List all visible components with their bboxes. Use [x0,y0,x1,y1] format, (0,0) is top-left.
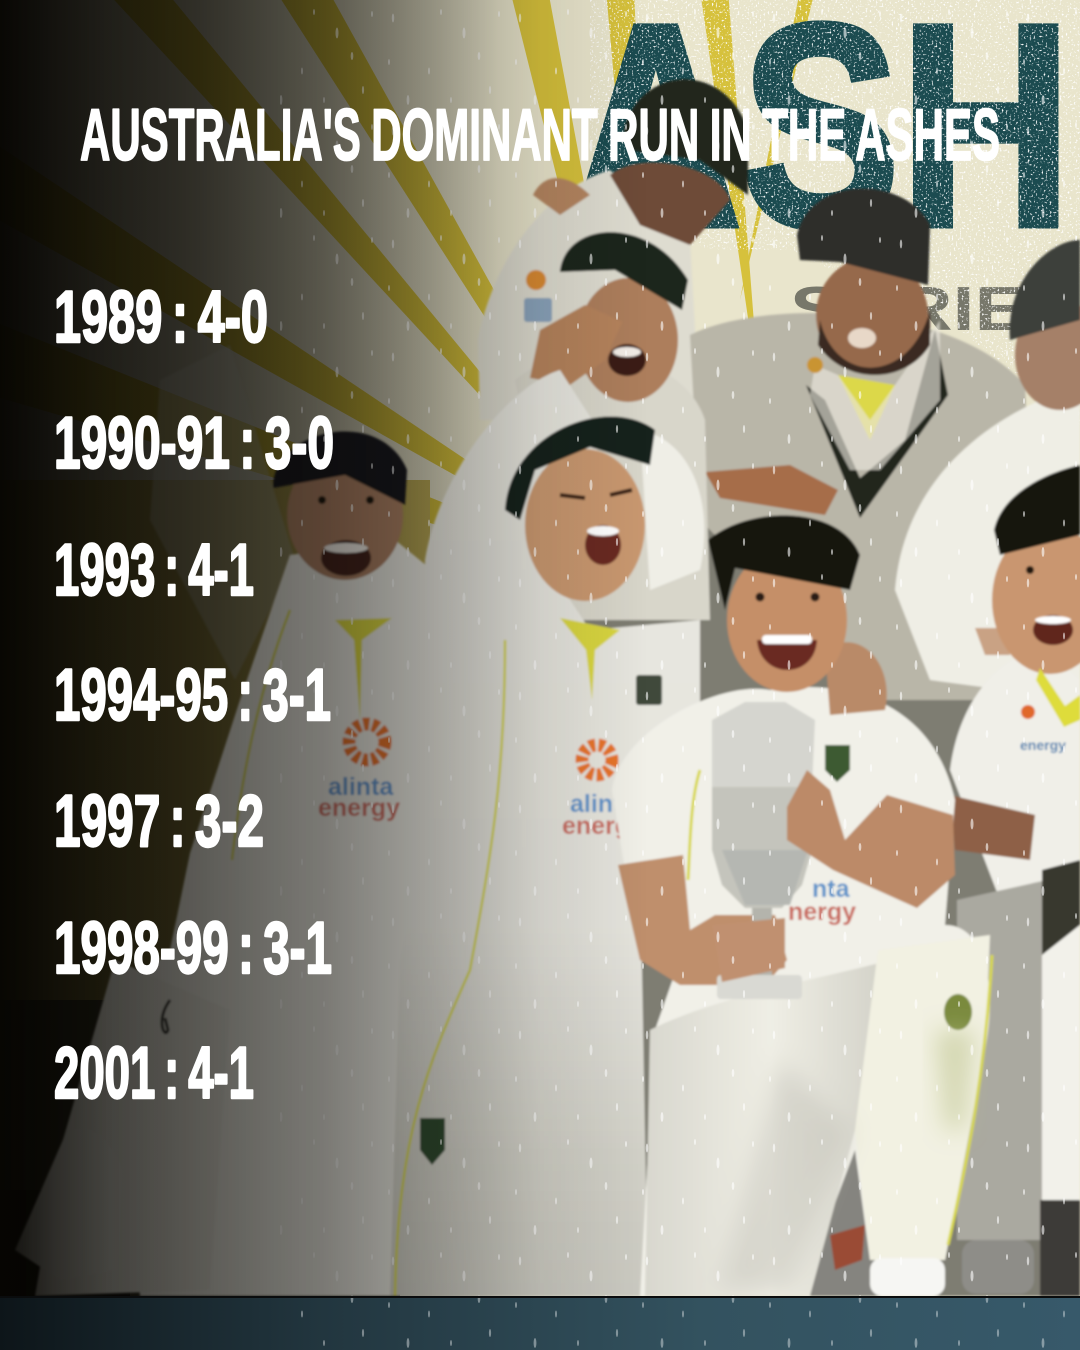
result: 1990-91: 1990-91 : 3-0 [54,403,334,484]
player: carey left [15,345,432,1296]
result: 2001: 2001 : 4-1 [54,1033,254,1114]
result: 1997: 1997 : 3-2 [54,781,264,862]
kookaburra pad mark [162,1000,170,1033]
bottom band [0,1296,1080,1350]
results list [54,277,334,1114]
logo: alinta energy on left shirt: energy [318,794,400,822]
muted lower-left backdrop [0,480,430,1000]
trophy [712,702,815,999]
logo: alinta energy on centre shirt: energy [562,812,644,840]
logo: alinta energy on cummins shirt: nta [812,875,851,903]
logo: alinta energy on centre shirt: alinta [570,790,636,818]
logo: alinta energy on centre shirt [562,792,621,840]
grey shoes in gap [812,1156,874,1296]
player: smith [515,232,710,620]
logo: alinta energy on cummins shirt [788,875,856,926]
logo: alinta energy on cummins shirt: nergy [788,898,856,926]
player: right front [950,465,1080,1296]
result: 1998-99: 1998-99 : 3-1 [54,908,332,989]
shirt badge [825,745,850,782]
player: labuschagne [390,370,700,1296]
dense spray over the backdrop [580,0,1080,430]
player: back centre [478,79,748,420]
result: 1993: 1993 : 4-1 [54,530,254,611]
result: 1989: 1989 : 4-0 [54,277,268,358]
player: lyon [690,189,1040,700]
spray of champagne droplets [280,0,1080,1350]
backdrop text: series: SERIES [790,275,1080,344]
shadowed space behind players [583,527,1042,1296]
player: top right partial [895,240,1080,700]
logo: alinta energy on left shirt: alinta [328,773,394,801]
logo: alinta energy on right shirt: energy [1020,737,1066,753]
result: 1994-95: 1994-95 : 3-1 [54,655,331,736]
red shoe detail [830,1225,865,1270]
logo: alinta energy on left shirt [318,773,400,822]
player: cummins with trophy [612,515,992,1296]
